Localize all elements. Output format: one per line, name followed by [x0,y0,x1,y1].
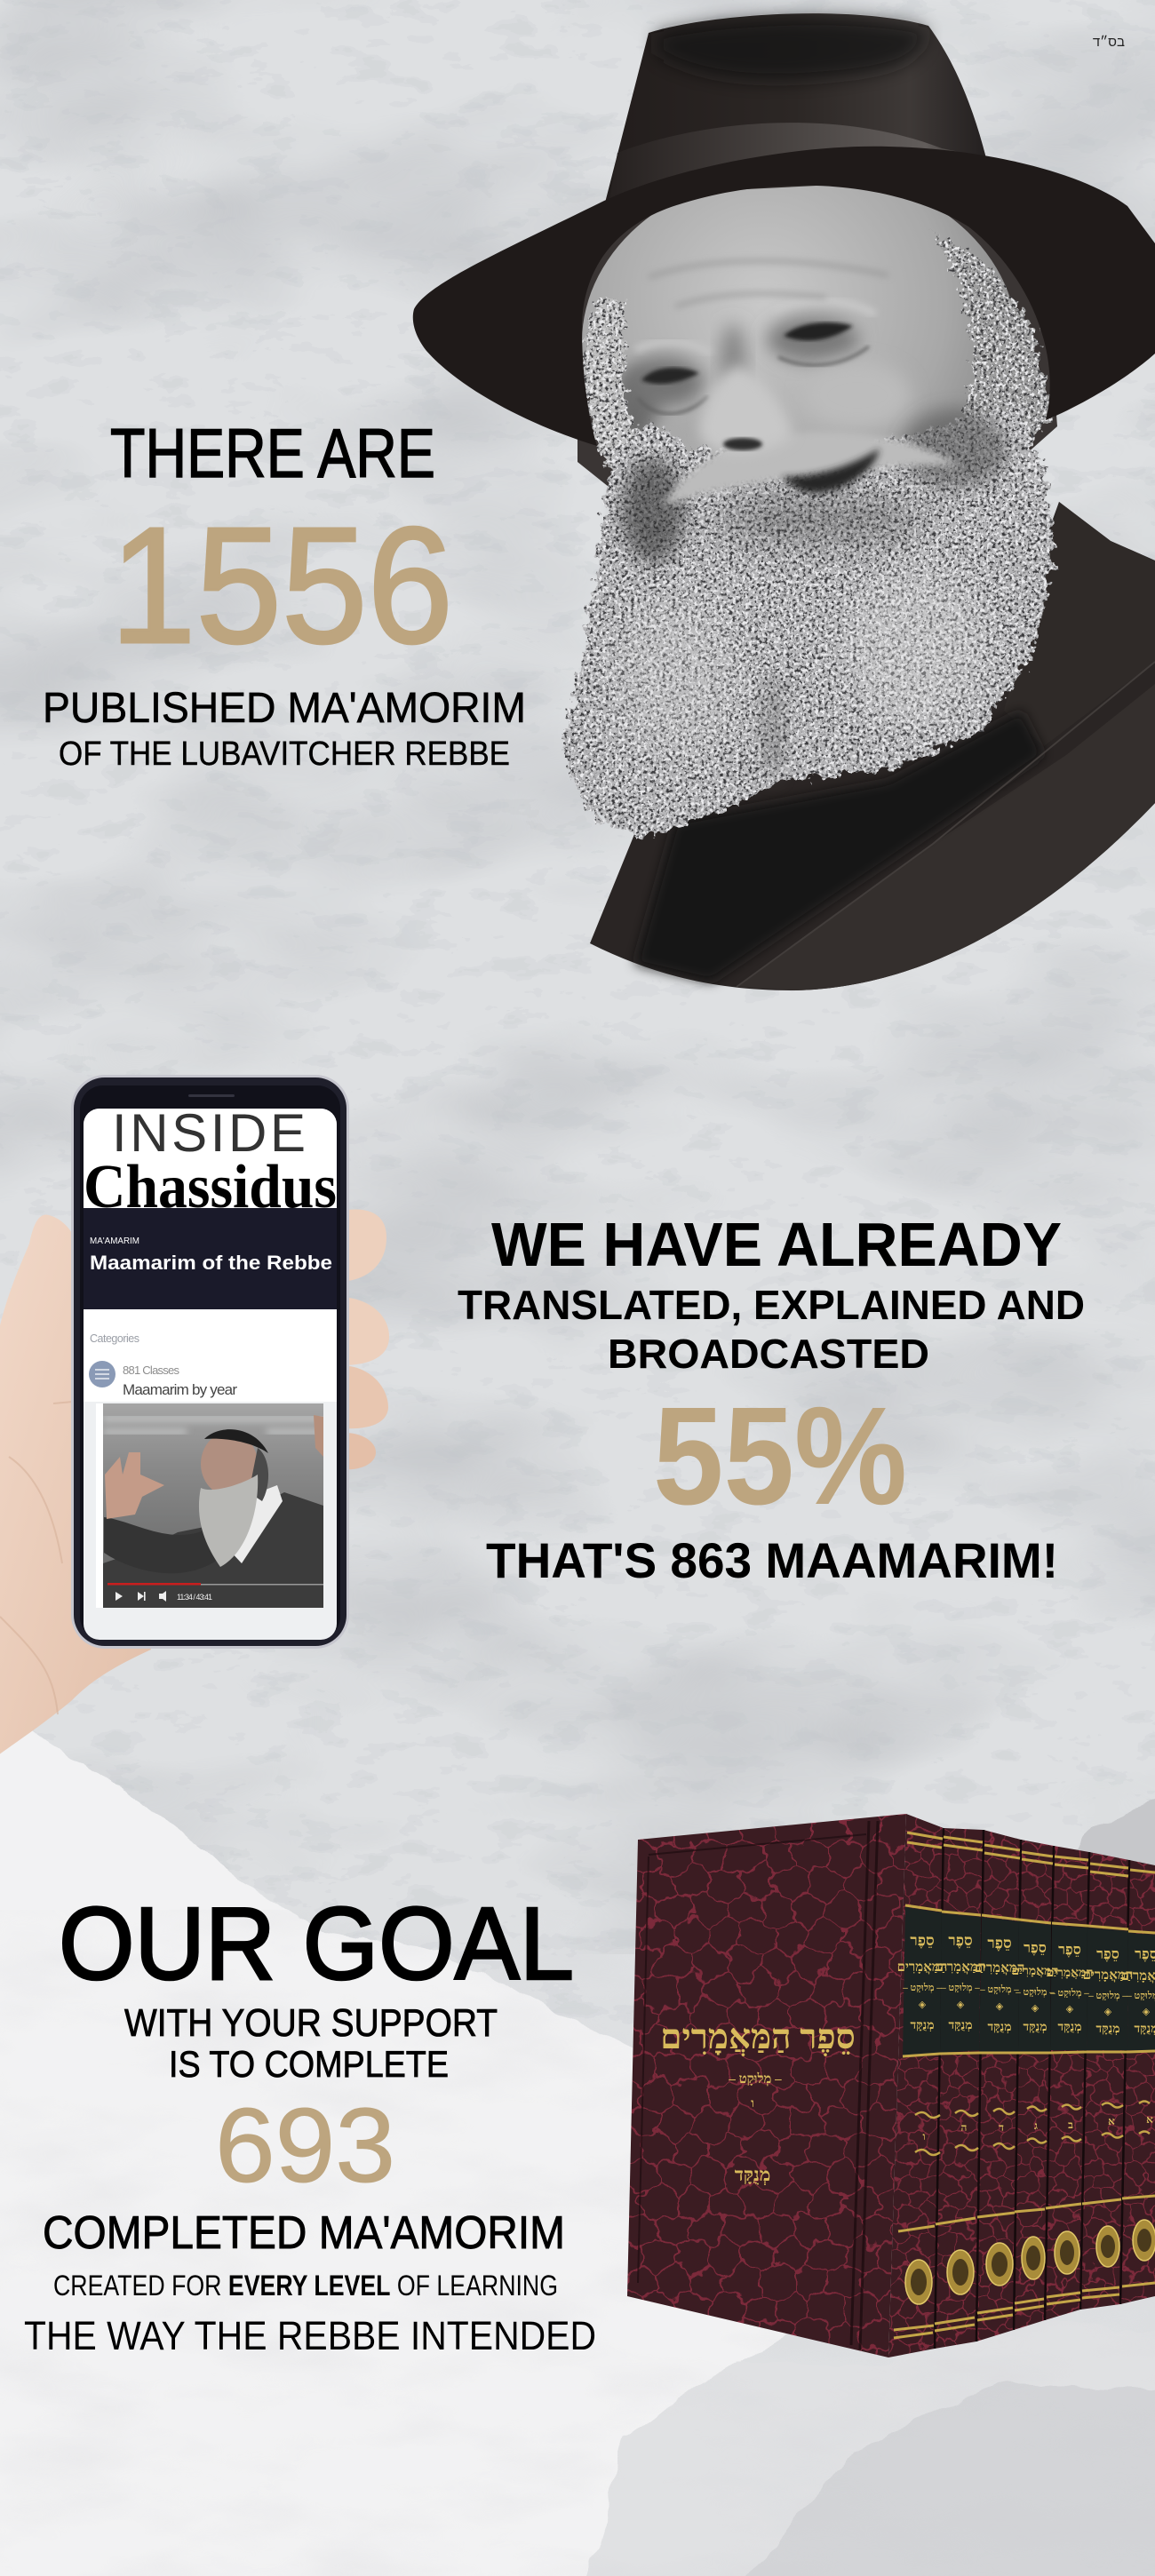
that's 863 maamarim: THAT'S 863 MAAMARIM! [486,1532,1058,1588]
coat [590,502,1155,990]
book cover title in Hebrew: סֵפֶר הַמַּאֲמָרִים [660,2018,856,2057]
broadcasted: BROADCASTED [608,1331,929,1377]
phone [71,1075,349,1649]
spine titles: ◈ [919,2000,927,2010]
speaker head [201,1439,256,1490]
spine titles: – מְלוּקָט – [1049,1988,1089,1999]
categories list: Maamarim by year [123,1381,237,1398]
spine titles: – מְלוּקָט – [940,1983,980,1993]
spine titles: מְנֻקָּד [1095,2023,1120,2036]
heading: our goal: OUR GOAL [59,1886,574,2001]
hand holding phone [0,1210,389,1755]
medallion inner rings [911,2229,1151,2295]
hat [413,13,1155,446]
translated, explained and: TRANSLATED, EXPLAINED AND [458,1282,1085,1328]
site logo: Chassidus [84,1153,337,1221]
book set [604,1794,1155,2381]
spine titles: הַמַּאֲמָרִים [897,1960,947,1975]
site logo [84,1109,337,1208]
section 1 text: 1556 published ma'amorim [43,414,526,773]
heading: we have already: WE HAVE ALREADY [491,1210,1062,1279]
hat brim [413,147,1155,446]
hat band [609,123,982,204]
right eye [784,322,853,340]
spine gold bands [894,1833,1155,2338]
spine titles: סֵפֶר [1058,1943,1081,1958]
spine medallions [905,2220,1155,2304]
section 2 text: already translated [458,1210,1085,1588]
dark title bar: MA'AMARIM [90,1236,139,1246]
of the lubavitcher rebbe: OF THE LUBAVITCHER REBBE [59,735,510,773]
spine titles: מְנֻקָּד [948,2019,973,2032]
spine titles: ◈ [1104,2007,1112,2017]
is to complete: IS TO COMPLETE [169,2043,449,2085]
spine titles: סֵפֶר [1096,1947,1119,1962]
dark title bar: Maamarim of the Rebbe [90,1252,332,1274]
spine titles: סֵפֶר [910,1932,935,1949]
cardigan and shirt [103,1492,323,1608]
the way the rebbe intended: THE WAY THE REBBE INTENDED [24,2313,596,2358]
spine titles: – מְלוּקָט – [979,1984,1019,1995]
published ma'amorim: PUBLISHED MA'AMORIM [43,685,526,732]
spine titles: ד [999,2121,1004,2134]
hand: palm and thumb [0,1214,151,1755]
phone screen [84,1103,337,1640]
spine titles: ה [961,2121,968,2134]
spine titles: סֵפֶר [1024,1941,1047,1956]
categories list: 881 Classes [123,1364,179,1377]
spine titles: הַמַּאֲמָרִים [1047,1967,1093,1980]
spine titles [897,1932,1155,2143]
dark title bar [84,1208,337,1309]
book: front cover [604,1794,924,2381]
spine titles: – מְלוּקָט – [902,1983,942,1993]
spine titles: א [1108,2115,1115,2127]
book: front cover: – מְלוּקָט – [728,2071,782,2087]
big number 1556: 1556 [110,494,453,678]
created for every level of learning: CREATED FOR EVERY LEVEL OF LEARNING [53,2270,558,2302]
spine titles: סֵפֶר [987,1935,1012,1952]
background: grey wash lower right [586,1794,1155,2576]
spine titles: ◈ [1143,2007,1151,2017]
spine titles: – מְלוּקָט – [1087,1991,1127,2001]
book: front cover: מְנֻקָּד [735,2164,770,2185]
big percentage 55%: 55% [653,1379,907,1534]
face [578,169,1057,515]
spine titles: הַמַּאֲמָרִים [975,1961,1024,1976]
spine titles: מְנֻקָּד [1057,2021,1082,2034]
player controls [116,1591,212,1602]
book: front cover: ו [751,2097,754,2111]
categories list [84,1309,337,1402]
hair at sides of the face [583,233,1050,475]
raised hand [105,1452,164,1519]
heading: there are: THERE ARE [110,414,435,492]
spine titles: ◈ [1032,2003,1040,2014]
site logo: INSIDE [112,1103,306,1163]
Hebrew header mark: בס״ד [1093,35,1125,50]
spine titles: – מְלוּקָט – [1015,1987,1055,1998]
completed ma'amorim: COMPLETED MA'AMORIM [43,2207,565,2259]
categories list: Categories [90,1332,139,1345]
left eye [641,368,699,384]
beard [562,404,1054,839]
spine titles: א [1146,2113,1153,2126]
spine titles: מְנֻקָּד [1023,2021,1047,2034]
video thumbnail [103,1403,323,1608]
hat crown [604,13,986,206]
moustache, mouth and nose [662,366,960,506]
player controls: 11:34 / 43:41 [177,1593,212,1602]
spine titles: ג [1034,2119,1038,2132]
spine titles: סֵפֶר [948,1932,973,1949]
spine titles: מְנֻקָּד [987,2021,1012,2034]
progress bar [201,1584,323,1585]
number 693: 693 [215,2087,395,2205]
section 3 text: our goal [24,1886,596,2358]
spine titles: הַמַּאֲמָרִים [936,1960,985,1975]
portrait of the Rebbe [413,13,1155,990]
spine ornaments [915,2102,1150,2155]
spine titles: ◈ [957,2000,965,2010]
book spines [880,1803,1155,2372]
forehead wrinkles [649,261,888,306]
spine titles: ◈ [996,2001,1004,2012]
spine titles: ב [1068,2119,1073,2131]
spine titles: הַמַּאֲמָרִים [1012,1965,1058,1978]
background: light torn paper area [0,1730,800,2576]
spine titles: מְנֻקָּד [910,2019,935,2032]
spine labels [903,1907,1155,2055]
with your support: WITH YOUR SUPPORT [124,2002,498,2045]
spine titles: ו [922,2130,926,2143]
spine titles: ◈ [1066,2004,1074,2015]
hand: fingers [342,1210,389,1469]
spine titles: הַמַּאֲמָרִים [1083,1968,1133,1983]
